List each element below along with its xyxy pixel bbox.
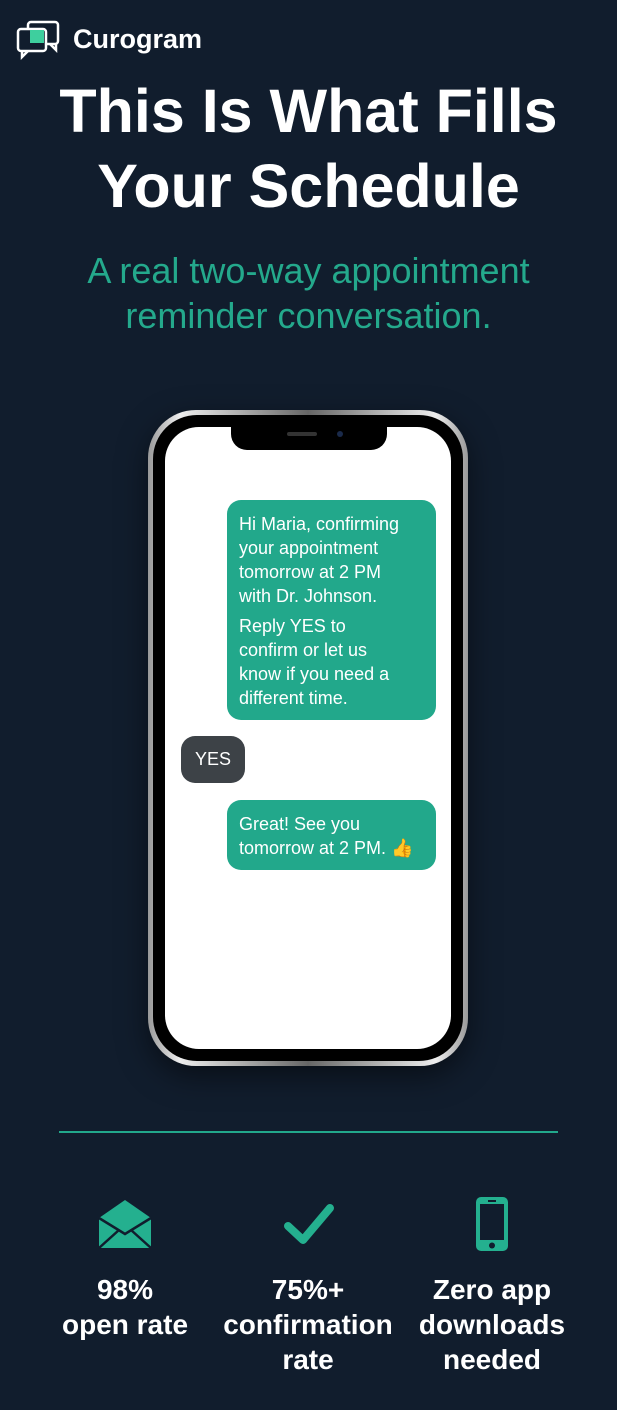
bubble: reminder: your appointment	[239, 538, 378, 558]
logo	[16, 20, 202, 60]
icon: phone	[476, 1197, 508, 1251]
stat: zero app: Zero app	[433, 1274, 551, 1305]
stat: zero app: needed	[443, 1344, 541, 1375]
subtitle	[87, 250, 530, 336]
bubble: confirmation	[227, 800, 436, 870]
bubble: reminder: Hi Maria, confirming	[239, 514, 399, 534]
title: This Is What Fills	[59, 77, 558, 145]
stat: zero app: downloads	[419, 1309, 565, 1340]
bubble: reminder: confirm or let us	[239, 640, 367, 660]
bubble: reminder: know if you need a	[239, 664, 389, 684]
bubble: reminder: with Dr. Johnson. Reply YES to	[239, 586, 377, 636]
stat: confirmation: rate	[282, 1344, 334, 1375]
subtitle: reminder conversation.	[125, 295, 492, 336]
bubble: confirmation: tomorrow at 2 PM. 👍	[239, 838, 413, 858]
bubble: YES: YES	[195, 749, 231, 769]
icon: check	[284, 1204, 334, 1244]
divider	[59, 1131, 558, 1133]
icon: envelope	[99, 1200, 151, 1248]
bubble: confirmation: Great! See you	[239, 814, 360, 834]
bubble: reminder	[227, 500, 436, 720]
subtitle: A real two-way appointment	[87, 250, 530, 291]
phone	[148, 410, 468, 1066]
title	[59, 77, 558, 220]
bubble: YES	[181, 736, 245, 783]
stat: confirmation: 75%+	[272, 1274, 344, 1305]
logo: Curogram	[73, 24, 202, 54]
notch	[231, 424, 387, 450]
stat: confirmation	[223, 1274, 393, 1375]
title: Your Schedule	[97, 152, 520, 220]
stat: confirmation: confirmation	[223, 1309, 393, 1340]
stat: open rate	[62, 1274, 188, 1340]
stat: zero app	[419, 1274, 565, 1375]
stat: open rate: 98%	[97, 1274, 153, 1305]
bubble: reminder: different time.	[239, 688, 348, 708]
stat: open rate: open rate	[62, 1309, 188, 1340]
bubble: reminder: tomorrow at 2 PM	[239, 562, 381, 582]
